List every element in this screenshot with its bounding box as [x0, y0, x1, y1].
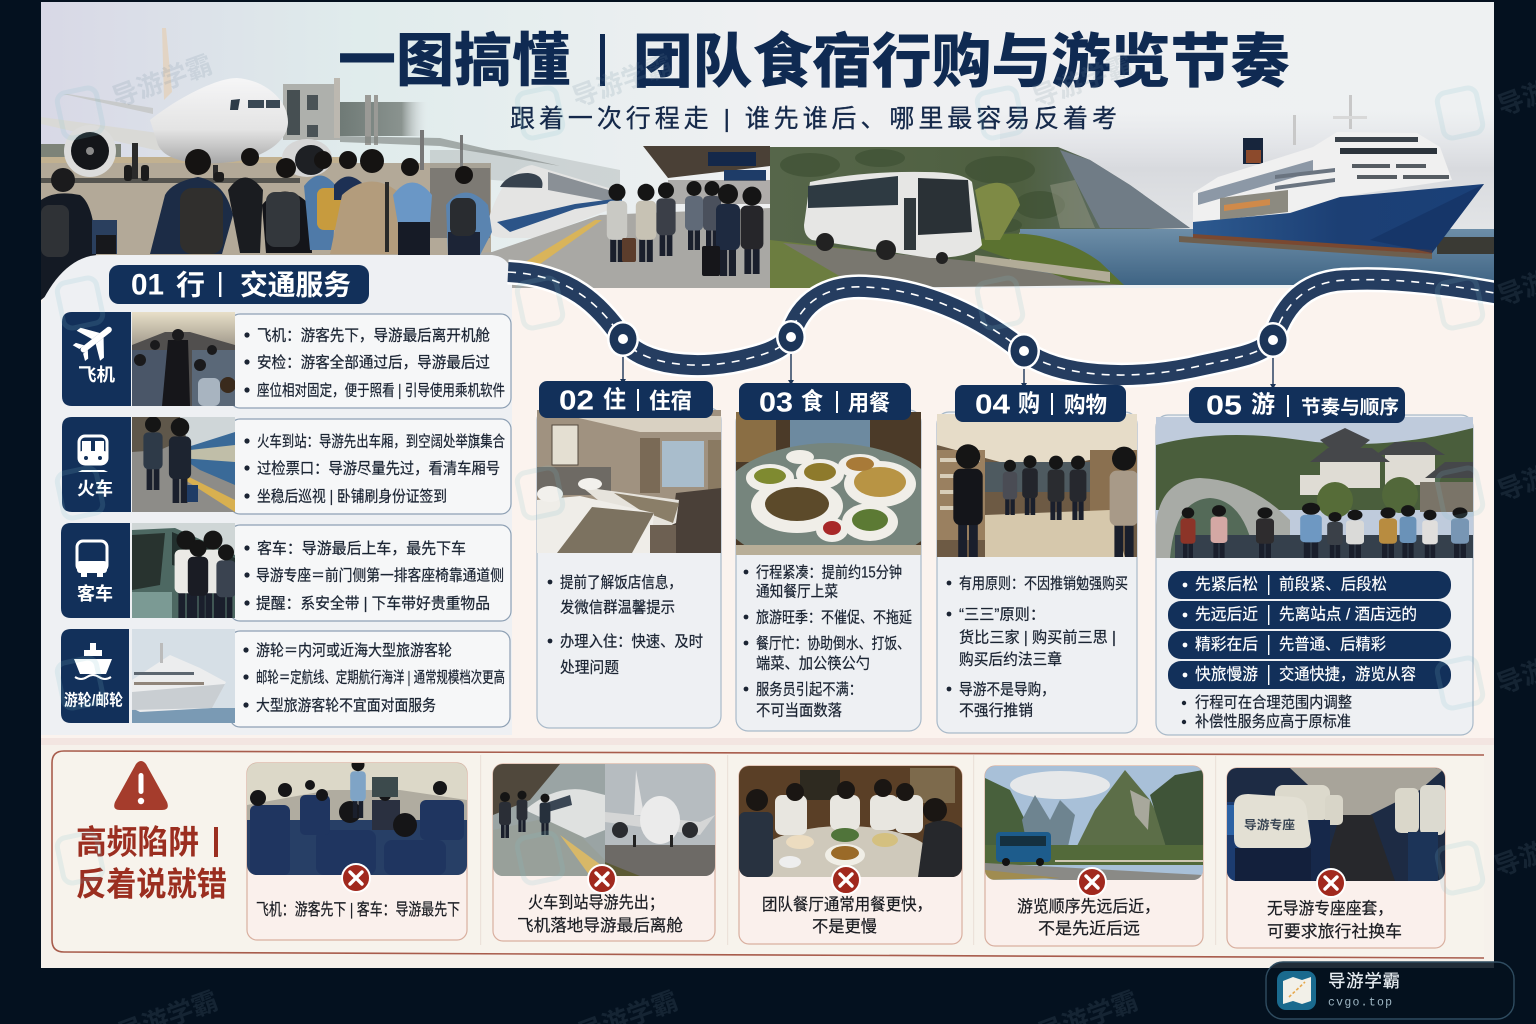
- brand badge: cvgo.top: [1328, 996, 1392, 1010]
- header: 02 住宿: 住宿: [649, 388, 692, 414]
- travellers foreground: [41, 148, 492, 300]
- card: 03 meals: 不可当面数落: [756, 702, 842, 720]
- card: 05 sightseeing: 补偿性服务应高于原标准: [1195, 712, 1351, 730]
- airplane: [41, 28, 332, 182]
- photo: airplane cabin: [132, 312, 235, 406]
- row: train: 过检票口：导游尽量先过，看清车厢号: [257, 460, 500, 478]
- airport apron: [41, 144, 491, 293]
- trap card 4: 游览顺序先远后近，: [1017, 897, 1160, 916]
- title: 团队食宿行购与游览节奏: [633, 29, 1290, 95]
- icon: airplane: 飞机: [78, 365, 115, 385]
- card: 03 meals: 行程紧凑：提前约15分钟: [756, 564, 902, 582]
- row: cruise: 邮轮＝定航线、定期航行海洋 | 通常规模档次更高: [256, 668, 505, 686]
- marker: wrong: [588, 865, 616, 893]
- card: 04 shopping: 不强行推销: [959, 702, 1033, 720]
- header: 01 交通服务: 01: [131, 268, 164, 302]
- heading: traps: 反着说就错: [76, 866, 227, 902]
- photo: coach boarding: [132, 523, 235, 618]
- trap card 5: 可要求旅行社换车: [1267, 922, 1402, 941]
- photo: coach seat cover: [1227, 768, 1445, 881]
- trap card 3: 不是更慢: [812, 916, 877, 936]
- rule pill: 先紧后松: [1168, 571, 1451, 599]
- jet bridge: [283, 78, 560, 175]
- icon: cruise ship: [61, 629, 129, 723]
- header: 05 节奏与顺序: [1189, 387, 1405, 423]
- row: coach: 客车：导游最后上车，最先下车: [257, 540, 466, 558]
- photo: group dinner: [739, 766, 962, 877]
- panel: common traps: [41, 738, 1494, 968]
- marker: wrong: [832, 866, 860, 894]
- icon: coach: [61, 523, 130, 618]
- card: 03 meals: 餐厅忙：协助倒水、打饭、: [756, 634, 910, 652]
- marker: wrong: [342, 864, 370, 892]
- title: [338, 28, 1290, 95]
- rule pill: 先远后近: 先离站点 / 酒店远的: [1279, 606, 1417, 624]
- trap card 3: [739, 766, 962, 944]
- header: 02 住宿: [539, 381, 713, 418]
- rule pill: 精彩在后: 先普通、后精彩: [1279, 636, 1386, 654]
- trap card 5: [1227, 768, 1445, 948]
- marker: wrong: [1078, 868, 1106, 896]
- cruise ship: [1179, 95, 1494, 259]
- brand badge: [1266, 962, 1514, 1019]
- card: 04 shopping: “三三”原则：: [959, 606, 1045, 624]
- card: 04 shopping: 货比三家 | 购买前三思 |: [959, 628, 1116, 646]
- row: airplane: 座位相对固定，便于照看 | 引导使用乘机软件: [257, 382, 505, 400]
- row: cruise: 大型旅游客轮不宜面对面服务: [256, 696, 436, 714]
- photo: banquet table: [736, 412, 921, 555]
- card: 02 accommodation: 处理问题: [560, 658, 619, 676]
- card: 02 accommodation: 发微信群温馨提示: [560, 598, 675, 616]
- watermarks: 导游学霸: [1028, 49, 1136, 113]
- header: 03 用餐: 03: [759, 386, 793, 418]
- row: coach: 导游专座＝前门侧第一排客座椅靠通道侧: [256, 566, 504, 584]
- header: 05 节奏与顺序: 05: [1206, 390, 1242, 420]
- icon: warning triangle: [114, 761, 168, 810]
- trap card 1: [247, 758, 467, 940]
- header: 04 购物: 购物: [1064, 392, 1107, 418]
- subtitle: 跟着一次行程走 | 谁先谁后、哪里最容易反着考: [510, 105, 1117, 133]
- rule pill: 先远后近: [1168, 601, 1451, 629]
- header: 04 购物: 04: [975, 388, 1010, 420]
- row: airplane: 飞机：游客先下，导游最后离开机舱: [257, 326, 490, 344]
- card: 03 meals: [718, 383, 942, 731]
- card: 04 shopping: 有用原则：不因推销勉强购买: [959, 574, 1128, 592]
- header: 02 住宿: 住: [603, 386, 626, 414]
- header: 03 用餐: 食: [801, 388, 823, 416]
- card: 04 shopping: 导游不是导购，: [959, 680, 1055, 698]
- heading: traps: 高频陷阱: [76, 824, 199, 860]
- hero travel scene: [41, 2, 1494, 300]
- photo: coach seat cover: 导游专座: [1244, 817, 1295, 832]
- icon: train: 火车: [77, 478, 113, 499]
- marker: wrong: [1317, 869, 1345, 897]
- photo: train platform: [132, 417, 235, 512]
- header: 05 节奏与顺序: 游: [1251, 392, 1275, 418]
- watermarks: 导游学霸: [568, 49, 676, 113]
- photo: cabin with blue seats: [247, 758, 467, 875]
- row: cruise: 游轮＝内河或近海大型旅游客轮: [256, 642, 452, 660]
- card: 02 accommodation: 提前了解饭店信息，: [560, 574, 682, 592]
- row: coach: [61, 523, 511, 621]
- rule pill: 先紧后松: 先紧后松: [1195, 576, 1258, 594]
- header: 01 交通服务: 行: [176, 270, 205, 300]
- icon: map logo: [1277, 971, 1316, 1010]
- trap card 2: [493, 764, 715, 941]
- rule pill: 快旅慢游: [1168, 661, 1451, 689]
- header: 04 购物: 购: [1018, 390, 1040, 418]
- header: 01 交通服务: [109, 265, 369, 304]
- card: 05 sightseeing: 行程可在合理范围内调整: [1195, 694, 1352, 712]
- header: 03 用餐: [739, 383, 911, 420]
- title: 一图搞懂: [338, 28, 570, 94]
- card: 05 sightseeing: [1156, 387, 1473, 735]
- stop: 02: [607, 321, 639, 384]
- row: cruise: [61, 629, 510, 727]
- icon: airplane: [62, 312, 131, 406]
- rule pill: 先紧后松: 前段紧、后段松: [1279, 576, 1387, 594]
- card: 04 shopping: 购买后约法三章: [959, 650, 1062, 668]
- icon: train: [62, 417, 131, 512]
- card: 03 meals: 旅游旺季：不催促、不拖延: [756, 608, 912, 626]
- card: 02 accommodation: 办理入住：快速、及时: [560, 632, 703, 650]
- row: coach: 提醒：系安全带 | 下车带好贵重物品: [256, 594, 490, 612]
- winding road with stops: [508, 272, 1500, 389]
- card: 02 accommodation: [537, 381, 721, 728]
- rule pill: 快旅慢游: 快旅慢游: [1195, 666, 1258, 684]
- platform crowd: [607, 181, 763, 276]
- trap card 5: 无导游专座座套，: [1267, 899, 1393, 918]
- header: 01 交通服务: 交通服务: [240, 270, 351, 300]
- card: 03 meals: 服务员引起不满：: [756, 680, 862, 698]
- trap card 4: 不是先近后远: [1038, 919, 1140, 938]
- row: airplane: [62, 312, 511, 408]
- photo: cruise ship: [132, 629, 235, 723]
- icon: coach: 客车: [77, 583, 113, 604]
- sea: [1020, 229, 1494, 285]
- rule pill: 快旅慢游: 交通快捷，游览从容: [1279, 666, 1416, 684]
- rule pill: 精彩在后: [1168, 631, 1451, 659]
- icon: cruise ship: 游轮/邮轮: [64, 690, 123, 710]
- row: train: 火车到站：导游先出车厢，到空阔处举旗集合: [257, 432, 505, 450]
- header: 05 节奏与顺序: 节奏与顺序: [1301, 396, 1399, 418]
- photo: train and plane: [493, 764, 715, 876]
- photo: ancient town crowd: [1156, 417, 1473, 558]
- brand badge: 导游学霸: [1328, 971, 1400, 991]
- trap card 2: 火车到站导游先出；: [528, 893, 664, 912]
- header: 04 购物: [955, 385, 1126, 422]
- photo: karst mountains and bus: [985, 766, 1203, 880]
- station platform: [430, 146, 770, 288]
- card: 03 meals: 通知餐厅上菜: [756, 582, 838, 600]
- row: airplane: 安检：游客全部通过后，导游最后过: [257, 354, 490, 372]
- stop: 05: [1257, 322, 1289, 389]
- roadside with bushes: [783, 183, 1124, 288]
- photo: souvenir shop: [937, 414, 1137, 557]
- hillside and cliff: [770, 147, 1190, 288]
- trap card 2: 飞机落地导游最后离舱: [517, 916, 684, 935]
- row: train: [62, 416, 511, 514]
- trap card 4: [985, 766, 1203, 946]
- row: train: 坐稳后巡视 | 卧铺刷身份证签到: [257, 488, 447, 506]
- panel: 01 transport services: [41, 255, 512, 735]
- trap card 3: 团队餐厅通常用餐更快，: [762, 895, 932, 914]
- rule pill: 先远后近: 先远后近: [1195, 606, 1258, 624]
- high-speed train: [430, 150, 622, 238]
- stop: 04: [1008, 333, 1040, 388]
- tour bus: [804, 172, 982, 264]
- card: 03 meals: 端菜、加公筷公勺: [756, 654, 870, 672]
- card: 04 shopping: [937, 385, 1138, 733]
- header: 03 用餐: 用餐: [848, 390, 890, 416]
- header: 02 住宿: 02: [559, 384, 594, 416]
- photo: hotel room: [537, 410, 721, 553]
- stop: 03: [776, 320, 806, 385]
- heading: traps: [76, 824, 227, 902]
- trap card 1: 飞机：游客先下 | 客车：导游最先下: [256, 900, 460, 919]
- rule pill: 精彩在后: 精彩在后: [1195, 636, 1258, 654]
- watermarks: 导游学霸: [108, 49, 216, 113]
